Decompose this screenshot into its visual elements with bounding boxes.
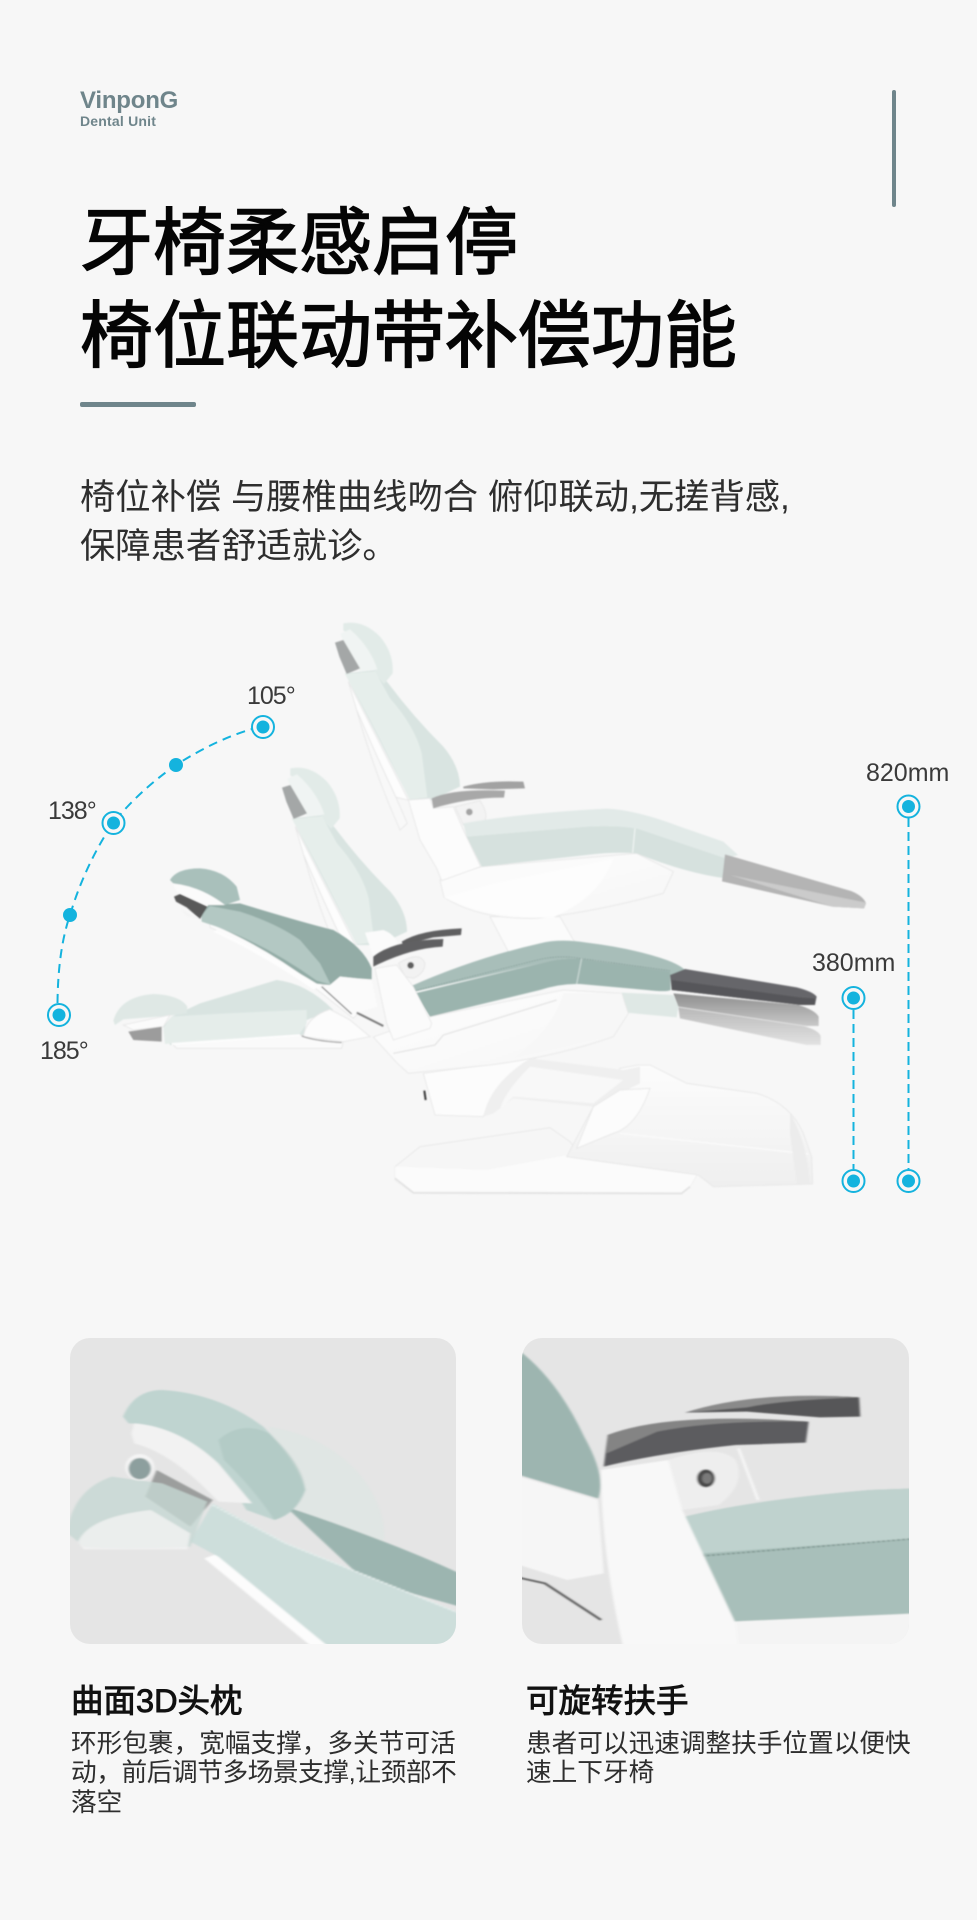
rear pedestal housing bbox=[567, 1065, 813, 1187]
ghost rear headrest bbox=[268, 1427, 384, 1577]
height dimension 380mm bbox=[842, 987, 864, 1192]
height dimension 820mm bbox=[898, 796, 920, 1192]
intro paragraph: 保障患者舒适就诊。 bbox=[80, 527, 398, 566]
base and lift column bbox=[395, 1057, 813, 1194]
recline angle arc bbox=[48, 716, 274, 1026]
footrest positions bbox=[678, 1007, 821, 1045]
midpoint dot upper bbox=[169, 758, 183, 772]
seat pad bbox=[685, 1488, 918, 1622]
logo bbox=[80, 87, 178, 129]
lift column bbox=[423, 1057, 537, 1117]
feature description: 落空 bbox=[71, 1789, 122, 1817]
floor plate bbox=[395, 1128, 697, 1194]
title: 牙椅柔感启停 bbox=[80, 203, 518, 284]
rear armrest bbox=[685, 1396, 860, 1417]
feature: headrest bbox=[71, 1683, 456, 1817]
label 138°: 138° bbox=[48, 797, 96, 825]
feature description: 速上下牙椅 bbox=[526, 1759, 654, 1787]
panel: headrest photo bbox=[70, 1338, 456, 1644]
seat shell bbox=[373, 990, 628, 1073]
feature description: 动，前后调节多场景支撑,让颈部不 bbox=[71, 1759, 456, 1787]
label 380mm: 380mm bbox=[812, 949, 895, 977]
marker 185° bbox=[48, 1004, 70, 1026]
white arm post bbox=[600, 1460, 738, 1648]
label 105°: 105° bbox=[247, 682, 295, 710]
middle chair seat and footrests bbox=[373, 941, 821, 1073]
feature description bbox=[526, 1730, 911, 1787]
headrest blobs bbox=[218, 1428, 305, 1520]
title: 椅位联动带补偿功能 bbox=[80, 296, 737, 377]
marker 138° bbox=[102, 812, 124, 834]
feature description: 环形包裹，宽幅支撑，多关节可活 bbox=[71, 1730, 456, 1758]
middle chair backrest (138° pale) bbox=[282, 768, 407, 975]
reclined green chair back bbox=[170, 868, 398, 1026]
seat back front surface bbox=[190, 1503, 459, 1648]
main headrest bbox=[122, 1390, 305, 1520]
intro paragraph: 椅位补偿 与腰椎曲线吻合 俯仰联动,无搓背感, bbox=[80, 478, 790, 517]
white frame bbox=[204, 1553, 347, 1648]
marker 105° bbox=[252, 716, 274, 738]
label 185°: 185° bbox=[40, 1037, 88, 1065]
midpoint dot lower bbox=[63, 908, 77, 922]
headrest white support bbox=[131, 1423, 252, 1503]
brand name: VinponG bbox=[80, 87, 178, 114]
title underline bbox=[80, 402, 196, 407]
ghost lower headrest bbox=[66, 1477, 207, 1548]
label 820mm: 820mm bbox=[866, 759, 949, 787]
white back frame bbox=[513, 1475, 603, 1580]
pivot lobe bbox=[668, 1448, 758, 1510]
dark footrest bbox=[670, 969, 817, 1005]
top chair position (105°) bbox=[335, 623, 866, 987]
feature: armrest bbox=[526, 1683, 911, 1787]
feature description bbox=[71, 1730, 456, 1817]
vertical accent bar bbox=[892, 90, 896, 207]
front armrest bbox=[603, 1419, 808, 1467]
adjustment rod bbox=[145, 1470, 212, 1527]
feature heading: 可旋转扶手 bbox=[526, 1683, 689, 1719]
front arm post and dark armrests bbox=[373, 928, 462, 1040]
flat chair position (185°) bbox=[113, 980, 370, 1048]
intro paragraph bbox=[80, 478, 790, 566]
seat back rear surface bbox=[285, 1507, 459, 1607]
seat frame bbox=[732, 1610, 918, 1648]
green backrest bbox=[513, 1347, 600, 1498]
panel: armrest photo bbox=[522, 1338, 909, 1644]
linkage bbox=[513, 1577, 600, 1620]
title bbox=[80, 203, 737, 377]
feature heading: 曲面3D头枕 bbox=[71, 1683, 243, 1719]
adjustment knob bbox=[125, 1454, 154, 1481]
green seat pad bbox=[408, 941, 685, 992]
chair position diagram bbox=[40, 622, 949, 1194]
feature description: 患者可以迅速调整扶手位置以便快 bbox=[526, 1730, 911, 1758]
brand subtitle: Dental Unit bbox=[80, 113, 156, 129]
